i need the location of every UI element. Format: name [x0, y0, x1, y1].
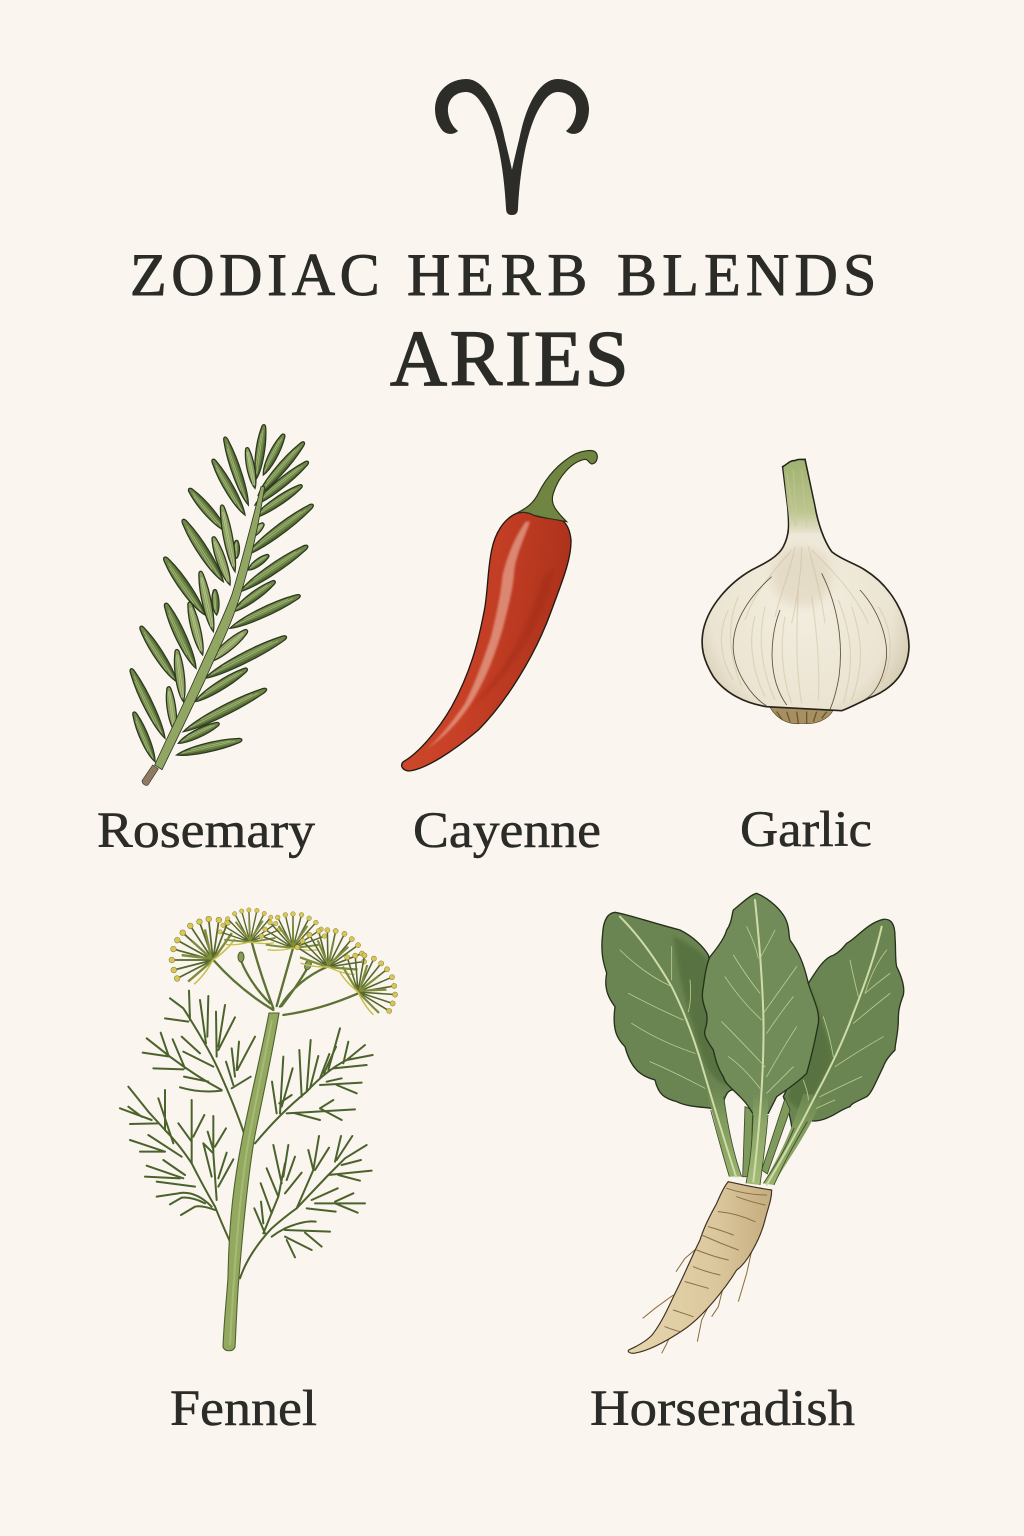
rosemary front needles [164, 447, 266, 732]
fennel buds [238, 952, 313, 971]
title: HERB [407, 242, 594, 308]
fennel rays [213, 942, 358, 1015]
panel: fennel illustration [120, 901, 412, 1351]
horseradish center leaf [702, 893, 819, 1113]
panel: rosemary illustration [127, 424, 316, 785]
icon: aries symbol [435, 79, 589, 215]
horseradish right leaf [783, 919, 904, 1140]
garlic roots [770, 707, 833, 724]
horseradish back stems [743, 1098, 790, 1177]
label: garlic: Garlic [740, 802, 872, 858]
cayenne shading [472, 567, 555, 707]
label: fennel: Fennel [170, 1381, 317, 1437]
horseradish root ridges [665, 1188, 767, 1332]
horseradish left leaf shading [673, 937, 730, 1087]
horseradish left petiole [705, 1087, 742, 1177]
horseradish right petiole [763, 1093, 823, 1185]
label: cayenne: Cayenne [413, 803, 601, 859]
fennel umbels [153, 901, 412, 1022]
cayenne highlight [425, 522, 530, 750]
cayenne body [402, 512, 571, 771]
fennel main stem [223, 1013, 279, 1351]
panel: horseradish illustration [602, 893, 904, 1353]
horseradish root [628, 1182, 772, 1353]
subtitle: aries: ARIES [390, 316, 631, 403]
rosemary back needles [127, 424, 316, 763]
label: horseradish: Horseradish [590, 1381, 855, 1437]
horseradish root hairs [643, 1243, 753, 1353]
fennel upper fronds [143, 991, 373, 1143]
garlic bulb [702, 459, 909, 711]
panel: cayenne illustration [402, 450, 597, 771]
panel: garlic illustration [702, 459, 909, 724]
horseradish right leaf shading [787, 987, 833, 1110]
title: BLENDS [617, 242, 882, 308]
label: rosemary: Rosemary [97, 803, 316, 859]
cayenne stem and calyx [515, 450, 597, 522]
rosemary stem base [142, 765, 158, 785]
garlic neck [783, 460, 821, 533]
garlic clove lines [733, 573, 887, 709]
horseradish midribs and veins [620, 900, 890, 1185]
garlic fibres [721, 470, 890, 703]
garlic shadow [772, 547, 832, 607]
rosemary stem [155, 487, 265, 770]
fennel lower fronds [120, 1087, 372, 1278]
title: ZODIAC [130, 242, 384, 308]
horseradish left leaf [602, 912, 737, 1110]
horseradish center petiole [746, 1093, 768, 1185]
